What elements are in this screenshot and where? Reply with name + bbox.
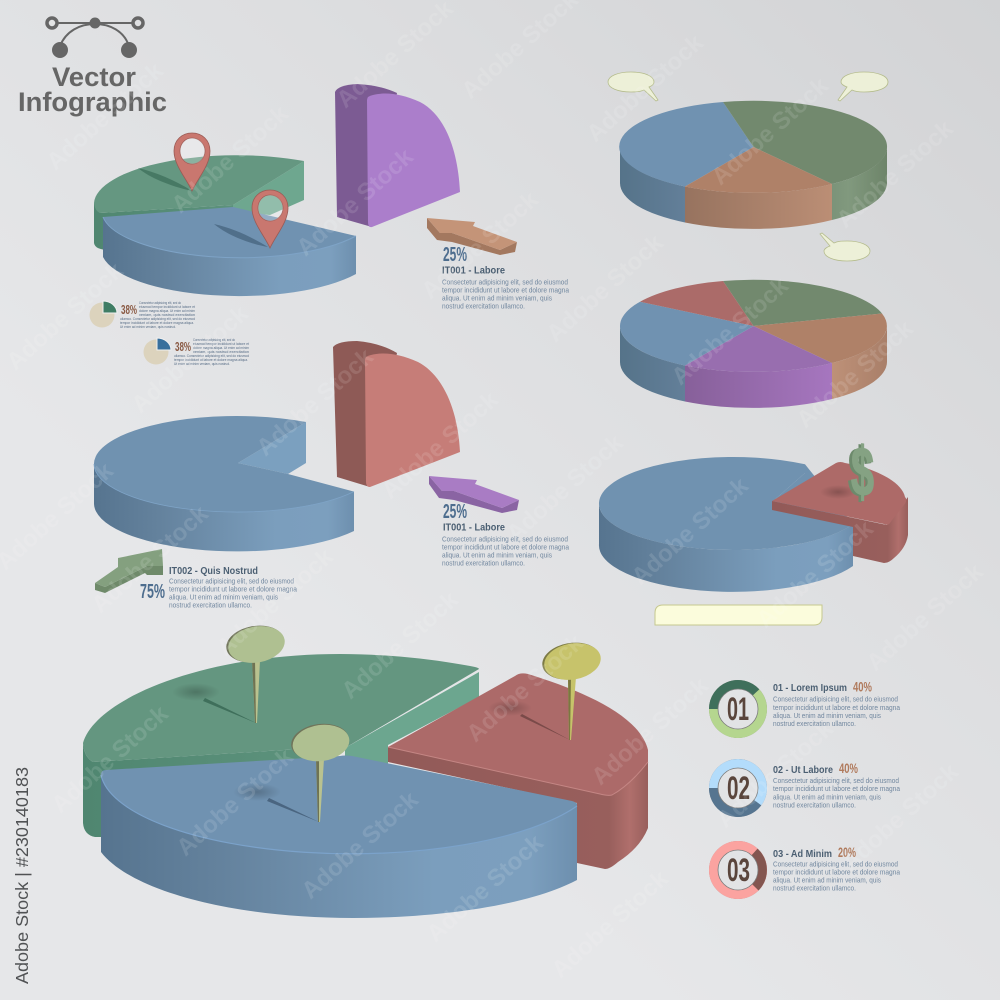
- watermark pattern: Adobe Stock: [541, 229, 669, 348]
- text block: IT001 Labore top: [442, 244, 570, 310]
- text block: IT001 Labore lower: aliqua. Ut enim ad minim veniam, quis: [442, 550, 552, 560]
- text block: IT001 Labore lower: [442, 501, 570, 568]
- small legend 2: ullamco. Consectetur adipisicing elit, sed do eiusmod: [174, 354, 249, 358]
- purple quarter slice: [335, 84, 460, 227]
- pin shadow green: [138, 168, 192, 191]
- watermark pattern: Adobe Stock: [831, 115, 959, 234]
- side faces: [620, 147, 685, 222]
- title: Infographic: [18, 87, 167, 117]
- watermark pattern: Adobe Stock: [706, 72, 834, 191]
- watermark pattern: Adobe Stock: [791, 315, 919, 434]
- legend ring 03: [709, 841, 767, 899]
- legend text 01: Consectetur adipisicing elit, sed do eiusmod: [773, 694, 898, 704]
- watermark pattern: Adobe Stock: [461, 629, 589, 748]
- text block: IT001 Labore top: aliqua. Ut enim ad minim veniam, quis: [442, 294, 552, 302]
- legend text 03: Consectetur adipisicing elit, sed do eiusmod: [773, 860, 898, 868]
- map pin 2: [252, 190, 288, 248]
- speech bubble 2: [838, 72, 888, 101]
- speech bubble 1: [608, 72, 658, 101]
- icon: dollar sign: [848, 431, 874, 512]
- blue slice: [101, 756, 577, 918]
- text block: IT001 Labore lower: 25%: [443, 501, 467, 523]
- brown arrow: [427, 218, 517, 255]
- side faces: [620, 326, 685, 402]
- watermark pattern: Adobe Stock: [41, 57, 169, 176]
- text block: IT002 Quis Nostrud: [140, 565, 298, 610]
- logo: vector infographic: [18, 18, 167, 117]
- blank label bar: [655, 605, 822, 625]
- text block: IT002 Quis Nostrud: tempor incididunt ut labore et dolore magna: [169, 584, 298, 594]
- green arrow: [95, 549, 163, 593]
- speech bubble 3: [820, 233, 870, 261]
- watermark pattern: Adobe Stock: [336, 586, 464, 705]
- icon: dollar sign: $: [851, 431, 874, 511]
- text block: IT001 Labore top: Consectetur adipisicing elit, sed do eiusmod: [442, 278, 568, 286]
- pie chart: three quarter blue: [94, 416, 354, 551]
- title: Vector: [52, 62, 136, 92]
- legend text 02: 02 - Ut Labore: [773, 764, 833, 776]
- blue slice: [103, 207, 356, 296]
- watermark pattern: Adobe Stock: [1, 257, 129, 376]
- pin shadow blue: [214, 224, 268, 247]
- legend ring 03: 03: [727, 852, 750, 888]
- legend text 03: 20%: [838, 844, 856, 860]
- top faces: [619, 102, 754, 186]
- legend text 01: [773, 678, 901, 728]
- purple arrow: [429, 476, 519, 513]
- watermark pattern: Adobe Stock: [291, 143, 419, 262]
- text block: IT002 Quis Nostrud: Consectetur adipisicing elit, sed do eiusmod: [169, 576, 294, 586]
- small legend 1: ullamco. Consectetur adipisicing elit, sed do eiusmod: [120, 317, 195, 321]
- text block: IT001 Labore lower: Consectetur adipisicing elit, sed do eiusmod: [442, 534, 568, 544]
- text block: IT001 Labore top: tempor incididunt ut labore et dolore magna: [442, 286, 570, 294]
- watermark pattern: Adobe Stock: [296, 786, 424, 905]
- watermark pattern: Adobe Stock: [581, 29, 709, 148]
- text block: IT002 Quis Nostrud: IT002 - Quis Nostrud: [169, 565, 258, 577]
- watermark pattern: Adobe Stock: [376, 386, 504, 505]
- legend text 01: 01 - Lorem Ipsum: [773, 682, 847, 694]
- small legend 1: Ut enim ad minim veniam, quis nostrud.: [120, 325, 176, 329]
- text block: IT001 Labore top: IT001 - Labore: [442, 264, 505, 276]
- legend text 02: [773, 760, 901, 810]
- legend ring 01: 01: [727, 691, 749, 727]
- small legend 2: tempor incididunt ut labore et dolore magna aliqua.: [174, 358, 248, 362]
- pie chart: green and blue with map pins: [94, 133, 356, 296]
- legend text 01: 40%: [853, 678, 872, 694]
- dollar shadow: [820, 485, 856, 499]
- legend text 03: 03 - Ad Minim: [773, 848, 832, 860]
- text block: IT002 Quis Nostrud: 75%: [140, 581, 165, 603]
- pie chart: five segments: [620, 280, 887, 408]
- watermark pattern: Adobe Stock: [836, 758, 964, 877]
- small legend 1: [90, 301, 195, 329]
- pushpin 1: [223, 621, 288, 723]
- red slice: [772, 462, 908, 563]
- legend ring 01: [709, 680, 767, 738]
- text block: IT002 Quis Nostrud: aliqua. Ut enim ad minim veniam, quis: [169, 592, 278, 602]
- small legend 2: Consectetur adipisicing elit, sed do: [193, 338, 235, 342]
- legend text 03: aliqua. Ut enim ad minim veniam, quis: [773, 876, 881, 884]
- small legend 2: 38%: [175, 339, 191, 354]
- red slice: [388, 673, 648, 869]
- watermark pattern: Adobe Stock: [86, 500, 214, 619]
- watermark pattern: Adobe Stock: [711, 715, 839, 834]
- watermark pattern: Adobe Stock: [251, 343, 379, 462]
- watermark pattern: Adobe Stock: [751, 515, 879, 634]
- small legend 1: 38%: [121, 302, 137, 317]
- watermark pattern: Adobe Stock: [546, 865, 674, 984]
- watermark pattern: Adobe Stock: [126, 300, 254, 419]
- watermark pattern: Adobe Stock: [46, 700, 174, 819]
- text block: IT001 Labore top: 25%: [443, 244, 467, 266]
- icon: dollar sign: $: [848, 432, 872, 512]
- stock id vertical text: Adobe Stock | #230140183: [12, 767, 32, 984]
- legend text 02: 40%: [839, 760, 858, 776]
- small legend 1: eiusmod tempor incididunt ut labore et: [139, 305, 195, 309]
- watermark pattern: Adobe Stock: [211, 543, 339, 662]
- legend text 01: tempor incididunt ut labore et dolore magna: [773, 703, 901, 712]
- small legend 2: [144, 338, 249, 366]
- text block: IT001 Labore lower: IT001 - Labore: [443, 522, 505, 534]
- text block: IT001 Labore lower: nostrud exercitation ullamco.: [442, 558, 525, 568]
- salmon quarter slice: [333, 341, 460, 487]
- top faces: [723, 280, 882, 326]
- small legend 2: dolore magna aliqua. Ut enim ad minim: [193, 346, 249, 350]
- text block: IT001 Labore top: nostrud exercitation ullamco.: [442, 302, 525, 310]
- legend text 02: nostrud exercitation ullamco.: [773, 800, 856, 810]
- text block: IT002 Quis Nostrud: nostrud exercitation ullamco.: [169, 600, 252, 610]
- pie chart: three segments: [619, 101, 887, 229]
- title: [18, 62, 167, 117]
- pie chart: blue with red slice and dollar: [599, 431, 908, 592]
- legend text 03: tempor incididunt ut labore et dolore magna: [773, 868, 901, 876]
- large pie chart: [83, 621, 648, 918]
- small legend 2: eiusmod tempor incididunt ut labore et: [193, 342, 249, 346]
- watermark pattern: Adobe Stock: [666, 272, 794, 391]
- watermark pattern: Adobe Stock: [171, 743, 299, 862]
- small legend 1: veniam, quis nostrud exercitation: [139, 313, 195, 317]
- pushpin 3: [289, 720, 352, 822]
- watermark pattern: Adobe Stock: [501, 429, 629, 548]
- map pin 1: [174, 133, 210, 191]
- watermark pattern: Adobe Stock: [416, 186, 544, 305]
- watermark pattern: Adobe Stock: [166, 100, 294, 219]
- shadow of pin 3: [233, 783, 319, 822]
- legend text 02: tempor incididunt ut labore et dolore magna: [773, 784, 901, 793]
- legend text 02: Consectetur adipisicing elit, sed do eiusmod: [773, 776, 899, 785]
- legend text 03: nostrud exercitation ullamco.: [773, 884, 856, 892]
- small legend 1: tempor incididunt ut labore et dolore magna aliqua.: [120, 321, 194, 325]
- small legend 2: Ut enim ad minim veniam, quis nostrud.: [174, 362, 230, 366]
- legend text 03: [773, 844, 901, 892]
- watermark pattern: Adobe Stock: [586, 672, 714, 791]
- small legend 2: veniam, quis nostrud exercitation: [193, 350, 249, 354]
- watermark pattern: Adobe Stock: [421, 829, 549, 948]
- small legend 1: Consectetur adipisicing elit, sed do: [139, 301, 181, 305]
- legend text 01: aliqua. Ut enim ad minim veniam, quis: [773, 711, 881, 720]
- watermark pattern: Adobe Stock: [626, 472, 754, 591]
- watermark pattern: Adobe Stock: [861, 558, 989, 677]
- legend text 02: aliqua. Ut enim ad minim veniam, quis: [773, 792, 881, 802]
- shadow of pin 2: [488, 700, 570, 740]
- small legend 1: dolore magna aliqua. Ut enim ad minim: [139, 309, 195, 313]
- legend ring 02: 02: [727, 770, 750, 806]
- pushpin 2: [539, 638, 604, 740]
- green slice: [94, 155, 304, 250]
- text block: IT001 Labore lower: tempor incididunt ut labore et dolore magna: [442, 542, 570, 552]
- legend text 01: nostrud exercitation ullamco.: [773, 719, 856, 728]
- green slice: [83, 654, 479, 837]
- shadow of pin 1: [172, 683, 256, 723]
- icon: bezier curve: [47, 18, 143, 58]
- blue body: [599, 457, 853, 592]
- legend ring 02: [709, 759, 767, 817]
